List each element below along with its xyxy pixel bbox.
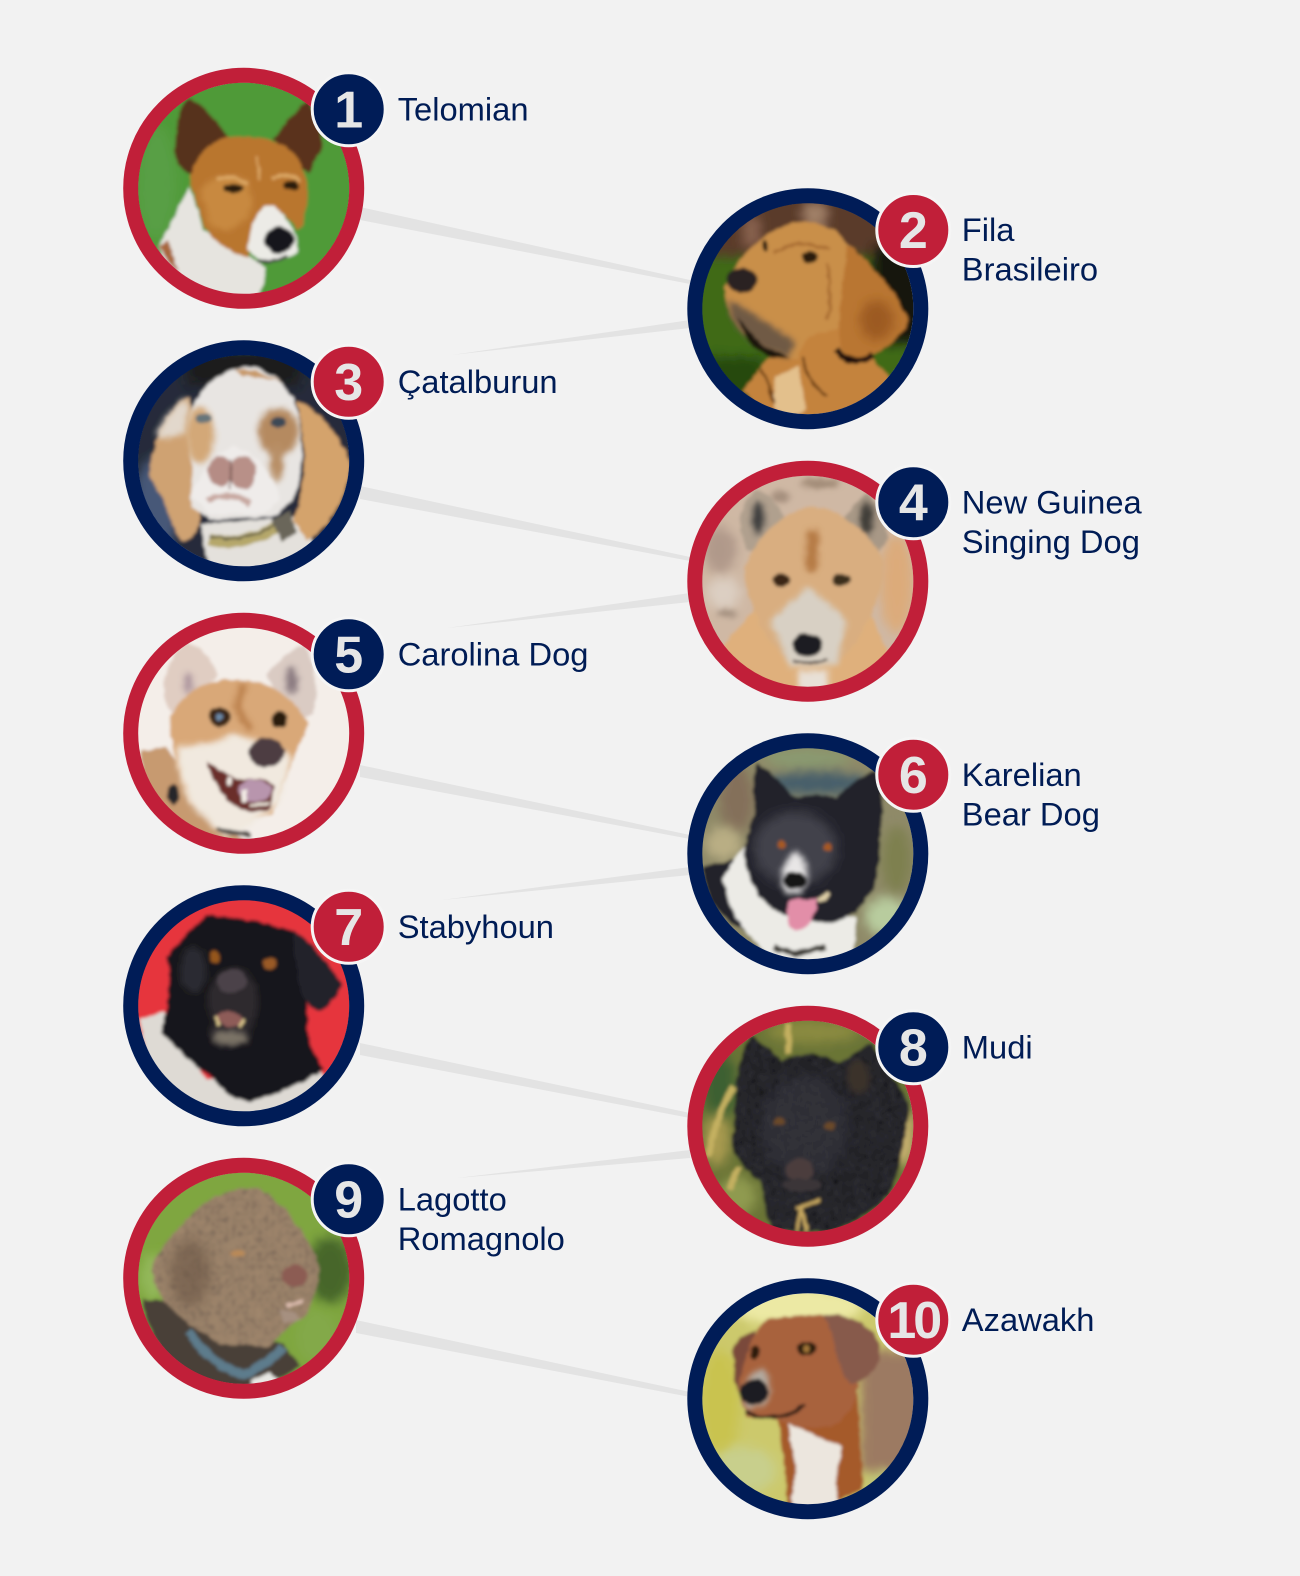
ring — [131, 75, 357, 301]
photo: Stabyhoun — [138, 900, 350, 1112]
ring — [131, 893, 357, 1119]
badge: 3 — [312, 345, 385, 418]
name: New Guinea — [962, 484, 1142, 521]
panel: 1 Telomian — [120, 67, 529, 313]
badge: 10: 10 — [887, 1292, 940, 1350]
photo: New Guinea Singing Dog — [702, 476, 914, 687]
badge: 1 — [312, 73, 385, 146]
photo: Fila Brasileiro — [702, 203, 914, 414]
name: Stabyhoun — [398, 908, 554, 945]
name: Carolina Dog — [398, 636, 588, 673]
panel: 8 Mudi — [687, 1003, 1033, 1250]
name: Bear Dog — [962, 795, 1100, 832]
name: Karelian — [962, 756, 1082, 793]
name: Romagnolo — [398, 1220, 565, 1257]
panel: 7 Stabyhoun — [120, 883, 554, 1130]
ring — [695, 741, 921, 967]
ring — [695, 1286, 921, 1512]
panel: 5 Carolina Dog — [120, 610, 588, 857]
name: Telomian — [398, 91, 529, 128]
badge: 5 — [312, 618, 385, 691]
badge: 5: 5 — [334, 626, 363, 684]
badge: 9: 9 — [334, 1172, 363, 1230]
photo: Telomian — [138, 82, 350, 294]
panel: 10 Azawakh — [687, 1277, 1094, 1523]
ring — [695, 1013, 921, 1239]
badge: 8 — [877, 1011, 950, 1084]
name: Azawakh — [962, 1301, 1094, 1338]
name: Çatalburun — [398, 363, 558, 400]
ring — [131, 620, 357, 846]
badge: 7 — [312, 890, 385, 963]
badge: 3: 3 — [334, 354, 363, 412]
badge: 8: 8 — [899, 1019, 928, 1077]
badge: 2 — [877, 194, 950, 266]
badge: 7: 7 — [334, 899, 363, 957]
badge: 2: 2 — [899, 202, 928, 260]
badge: 9 — [312, 1163, 385, 1236]
photo: Azawakh — [702, 1293, 914, 1504]
badge: 1: 1 — [334, 82, 363, 140]
ring — [695, 196, 921, 422]
name: Brasileiro — [962, 250, 1098, 287]
photo: Karelian Bear Dog — [702, 748, 914, 959]
connector lines — [356, 207, 690, 1397]
photo: Carolina Dog — [138, 628, 349, 839]
ring — [695, 468, 921, 694]
badge: 4: 4 — [899, 474, 928, 532]
panel: 9 Lagotto Romagnolo — [120, 1157, 565, 1403]
badge: 6: 6 — [899, 747, 928, 805]
name: Fila — [962, 211, 1014, 248]
photo: Mudi — [702, 1020, 914, 1232]
panel: 6 Karelian Bear Dog — [687, 730, 1100, 977]
panel: 3 Çatalburun — [120, 337, 558, 583]
photo: Lagotto Romagnolo — [138, 1172, 350, 1384]
name: Lagotto — [398, 1181, 507, 1218]
ring — [131, 1165, 357, 1391]
panel: 2 Fila Brasileiro — [680, 187, 1098, 433]
badge: 10 — [877, 1283, 950, 1356]
badge: 4 — [877, 466, 950, 539]
name: Singing Dog — [962, 523, 1140, 560]
panel: 4 New Guinea Singing Dog — [687, 460, 1142, 703]
ring — [131, 348, 357, 574]
name: Mudi — [962, 1029, 1033, 1066]
photo: Çatalburun — [138, 355, 350, 566]
badge: 6 — [877, 738, 950, 811]
